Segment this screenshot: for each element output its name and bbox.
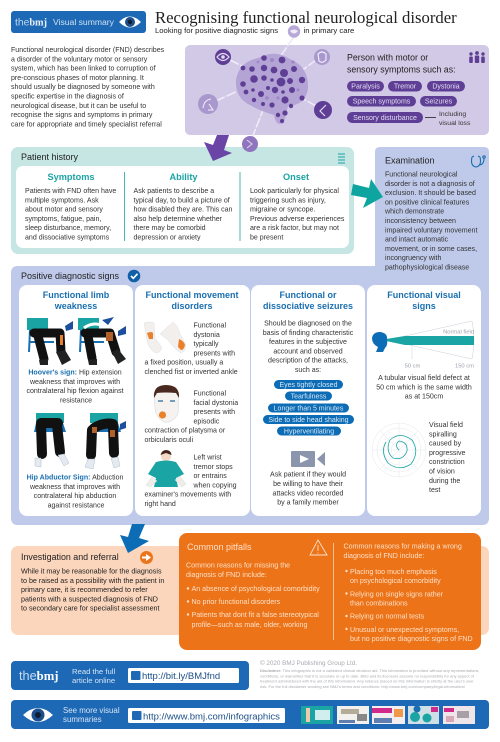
column: ability: Ask patients to describe a xyxy=(134,188,214,195)
column: onset: Previous adverse experiences xyxy=(250,216,345,223)
left column: profile—such as male, older, working xyxy=(192,621,307,629)
card: functional movement disorders: a fixed position, usually a xyxy=(144,360,223,367)
seizure feature pills: Tearfulness xyxy=(291,394,327,400)
card: functional movement disorders: or entrains xyxy=(194,473,227,480)
intro text: recognise the signs and symptoms in primary xyxy=(11,112,153,119)
header badge: Visual summary xyxy=(53,17,115,27)
card: functional movement disorders: tremor stops xyxy=(194,464,233,471)
footer: article link xyxy=(11,661,249,690)
card: visual signs: Functional visual xyxy=(387,290,461,300)
column: symptoms: and dissociative symptoms xyxy=(25,234,110,242)
card: visual signs: of vision xyxy=(429,468,455,476)
icon: mouth xyxy=(288,25,300,38)
brain illustration xyxy=(216,38,316,138)
symptom pills: visual loss xyxy=(439,120,471,127)
diagram: spiral field xyxy=(372,423,426,477)
seizure feature pills: Eyes tightly closed xyxy=(280,382,338,389)
thumbnails xyxy=(301,706,475,724)
card: functional movement disorders: orbicularis oculi xyxy=(144,437,193,444)
icon: stethoscope xyxy=(472,156,485,167)
column: onset: triggering such as injury, xyxy=(250,197,326,204)
card: seizures: description of the attacks, xyxy=(268,358,348,365)
column: ability: there may be comorbid xyxy=(134,225,206,232)
panel: positive diagnostic signs xyxy=(11,147,489,525)
icon: video camera xyxy=(291,451,325,467)
card: visual signs: signs xyxy=(412,301,436,311)
card: functional movement disorders: facial dystonia xyxy=(194,400,238,407)
card: functional movement disorders: clenched fist or inverted ankle xyxy=(144,369,238,376)
card: seizures: dissociative seizures xyxy=(263,301,353,311)
footer: more visual summaries xyxy=(11,700,489,729)
right column: Unusual or unexpected symptoms, xyxy=(350,626,459,634)
card: functional limb weakness: Functional limb xyxy=(43,290,110,300)
heading: Positive diagnostic signs xyxy=(21,271,120,281)
card: functional limb weakness xyxy=(19,285,133,516)
intro text: should usually be diagnosed by someone with xyxy=(11,84,155,91)
right column: Placing too much emphasis xyxy=(350,568,437,576)
seizure feature pills: Longer than 5 minutes xyxy=(274,406,344,412)
card: seizures: be willing to have their xyxy=(273,481,344,488)
panel: investigation and referral: to secondary care for specialist assessment xyxy=(21,605,160,613)
examination text: impaired voluntary movement xyxy=(385,227,477,234)
header badge xyxy=(11,11,146,33)
card: functional movement disorders: episodic xyxy=(194,418,220,425)
right column: on psychological comorbidity xyxy=(350,577,441,585)
column: symptoms: sleep disturbance, memory, xyxy=(25,225,111,232)
illustration: hip abductor sign xyxy=(34,413,126,469)
copyright and disclaimer: treatment administered with the aid of this information. Any reliance placed on this information is strictly at the user's own xyxy=(260,679,473,684)
subtitle: Looking for positive diagnostic signs xyxy=(155,26,278,35)
right column: diagnosis of FND include: xyxy=(344,552,424,560)
examination text: inconsistency between xyxy=(385,218,456,225)
intro text: Functional neurological disorder (FND) describes xyxy=(11,47,165,54)
column: onset: Look particularly for physical xyxy=(250,188,339,195)
footer: article link: thebmj xyxy=(19,669,58,683)
copyright and disclaimer: Disclaimer: This infographic is not a validated clinical decision aid. This information is provided without any representations, xyxy=(260,668,480,673)
footer: article link: http://bit.ly/BMJfnd xyxy=(142,671,220,682)
examination text: exclusion. It should be based xyxy=(385,190,476,197)
copyright and disclaimer: © 2020 BMJ Publishing Group Ltd. xyxy=(260,659,357,667)
symptom pills: Sensory disturbance xyxy=(353,115,417,122)
seizure feature pills xyxy=(263,380,354,436)
intro text: specific expertise in the diagnosis of xyxy=(11,94,124,100)
examination text: on positive clinical features xyxy=(385,199,470,206)
column: symptoms: about motor and sensory xyxy=(25,207,103,214)
card: functional movement disorders: dystonia xyxy=(194,332,220,339)
examination text: which demonstrate xyxy=(384,209,444,216)
card: seizures: Functional or xyxy=(280,290,337,300)
card: functional movement disorders: Functional movement xyxy=(145,290,239,300)
arrow: blue xyxy=(120,524,149,553)
symptom pills: Including xyxy=(439,111,466,118)
examination text: disorder is not a diagnosis of xyxy=(385,181,475,188)
card: seizures: Should be diagnosed on the xyxy=(264,320,352,328)
card: functional movement disorders: Left wrist xyxy=(194,454,222,462)
card: seizures: Ask patient if they would xyxy=(270,472,346,478)
right column: than combinations xyxy=(350,600,408,608)
panel: common pitfalls: Common pitfalls xyxy=(187,542,252,552)
diagram: tubular field: Normal field xyxy=(443,330,474,336)
card: visual signs xyxy=(367,285,481,516)
panel heading: sensory symptoms such as: xyxy=(347,64,456,74)
column: ability: typical day, to build a picture of xyxy=(134,197,230,204)
card: visual signs: constriction xyxy=(429,459,465,466)
icon: warning triangle xyxy=(310,540,327,555)
right column: Relying on single signs rather xyxy=(350,590,444,598)
right column xyxy=(344,542,473,643)
symptom pills: Tremor xyxy=(394,84,417,91)
card: functional limb weakness: Hoover's sign: Hip extension xyxy=(28,370,122,376)
card: functional movement disorders xyxy=(135,285,250,516)
card: visual signs: progressive xyxy=(429,450,466,457)
intro text: system, which has been linked to corruption of xyxy=(11,66,156,73)
panel: investigation and referral: While it may be reasonable for the diagnosis xyxy=(21,568,162,576)
title: Recognising functional neurological disorder xyxy=(155,8,457,27)
seizure feature pills: Hyperventilating xyxy=(284,428,334,436)
icon: orange arrow xyxy=(140,551,153,564)
card: functional limb weakness: contralateral hip flexion against xyxy=(26,388,124,395)
symptom pills: Seizures xyxy=(425,99,453,106)
illustration: tremor xyxy=(146,450,186,487)
column: onset: be present xyxy=(250,234,283,242)
card: visual signs: during the xyxy=(429,478,460,485)
card: visual signs: test xyxy=(429,487,440,494)
diagram: tubular field: 150 cm xyxy=(455,364,474,370)
column: symptoms: Symptoms xyxy=(48,172,94,182)
footer: article link: Read the full xyxy=(72,667,115,676)
column: ability: depression or anxiety xyxy=(134,234,201,242)
card: functional movement disorders: right hand xyxy=(144,501,176,508)
illustration: Hoover's sign xyxy=(27,317,126,365)
intro text: neurological disease, but it can be useful to xyxy=(11,103,146,110)
card: seizures: account and observed xyxy=(273,348,343,355)
card: visual signs: 50 cm which is the same width xyxy=(376,384,472,391)
card: visual signs: A tubular visual field defect at xyxy=(378,375,470,382)
illustration: face xyxy=(154,385,179,422)
card: seizures: by a family member xyxy=(277,500,339,507)
card: functional limb weakness: weakness that improves with xyxy=(29,484,120,491)
card: functional limb weakness: against resistance xyxy=(48,502,104,509)
examination text: pathophysiological disease xyxy=(385,264,469,272)
panel: investigation and referral: to be raised as a possibility with the patient in xyxy=(21,577,164,585)
icon: check xyxy=(128,270,140,282)
examination text xyxy=(384,156,479,272)
card: functional limb weakness: Hip Abductor Sign: Abduction xyxy=(27,474,123,482)
heading: Patient history xyxy=(21,152,79,162)
panel: investigation and referral: primary care, it is recommended to refer xyxy=(21,586,148,594)
copyright and disclaimer: conditions, or warranties that it is accurate or up to date. BMJ and its licensors assume no responsibility for any aspect of xyxy=(260,673,475,678)
arrow: purple xyxy=(204,135,232,161)
card: seizures: attacks video recorded xyxy=(273,490,344,497)
panel: person with symptoms xyxy=(185,25,489,138)
card: functional movement disorders: disorders xyxy=(171,301,213,311)
left column: Common reasons for missing the xyxy=(186,562,290,570)
footer: article link: article online xyxy=(72,676,115,685)
symptom pills: Speech symptoms xyxy=(353,99,411,106)
column: symptoms: symptoms, fatigue, pain, xyxy=(25,216,101,223)
icon: leg xyxy=(198,94,218,114)
panel heading: Person with motor or xyxy=(347,52,428,62)
column: symptoms: Patients with FND often have xyxy=(25,188,116,195)
card: visual signs: caused by xyxy=(429,441,462,448)
card: functional limb weakness: resistance xyxy=(60,397,92,404)
intro text: pre-conscious phases of motor planning. It xyxy=(11,75,144,82)
card: functional limb weakness: weakness xyxy=(54,301,97,311)
card: functional movement disorders: when copying xyxy=(192,482,237,489)
card: functional movement disorders: typically xyxy=(194,341,219,348)
intro text: a disorder of the voluntary motor or sensory xyxy=(11,56,148,63)
column: symptoms xyxy=(25,172,118,242)
card: functional movement disorders: presents with xyxy=(194,409,235,416)
panel: common pitfalls xyxy=(179,533,481,650)
seizure feature pills: Side to side head shaking xyxy=(268,417,349,424)
diagram: tubular field xyxy=(372,321,474,370)
column: ability: Ability xyxy=(169,172,198,182)
column: onset: are a risk factor, but may not xyxy=(250,225,339,232)
left column: No prior functional disorders xyxy=(192,598,281,606)
column: ability xyxy=(134,172,234,242)
symptom pills xyxy=(347,81,471,127)
column: onset: migraine or syncope. xyxy=(250,207,315,214)
icon: hand xyxy=(314,49,330,65)
card: seizures: basis of finding characteristic xyxy=(263,330,354,337)
card: functional movement disorders: Functional xyxy=(194,390,226,398)
examination text: incongruency with xyxy=(385,255,441,262)
examination text: Functional neurological xyxy=(385,172,458,178)
card: functional limb weakness: weakness that improves with xyxy=(29,379,120,386)
card: seizures: features in the subjective xyxy=(269,339,347,346)
panel: patient history xyxy=(11,147,354,254)
card: seizures: such as: xyxy=(295,367,321,374)
card: visual signs: Visual field xyxy=(429,422,463,429)
card: visual signs: as at 150cm xyxy=(405,394,443,401)
right column: but no positive diagnostic signs of FND xyxy=(350,635,473,643)
card: functional limb weakness: contralateral hip abduction xyxy=(34,493,116,500)
card: visual signs: spiralling xyxy=(429,431,457,438)
panel: investigation and referral: Investigation and referral xyxy=(21,552,119,562)
card: seizures xyxy=(251,285,365,516)
column: ability: also help determine whether xyxy=(134,216,223,223)
left column: An absence of psychological comorbidity xyxy=(192,585,320,593)
subtitle: in primary care xyxy=(304,26,354,35)
icon: eye xyxy=(215,49,231,65)
examination text: and intact automatic xyxy=(385,237,449,244)
right column: Common reasons for making a wrong xyxy=(344,542,462,550)
examination text: Examination xyxy=(385,156,435,166)
footer: more visual summaries: http://www.bmj.com/infographics xyxy=(143,712,280,722)
illustration: foot and hand xyxy=(144,322,186,353)
header badge: thebmj xyxy=(15,18,47,28)
left column: diagnosis of FND include: xyxy=(186,571,267,579)
card: functional movement disorders: Functional xyxy=(194,322,226,330)
column: onset xyxy=(250,172,346,242)
icon: eye xyxy=(23,708,53,722)
column: symptoms: multiple symptoms. Ask xyxy=(25,197,99,204)
panel: investigation and referral xyxy=(11,546,489,635)
panel: investigation and referral: patients with a suspected diagnosis of FND xyxy=(21,595,158,603)
examination text: movement, or in some cases, xyxy=(385,246,477,253)
symptom pills: Paralysis xyxy=(351,84,380,91)
column: ability: how disabled they are. This can xyxy=(134,207,233,214)
card: functional movement disorders: presents with xyxy=(194,350,235,357)
intro text: care for appropriate and timely specialist referral xyxy=(11,121,162,128)
diagram: tubular field: 50 cm xyxy=(405,364,421,370)
symptom pills: Dystonia xyxy=(432,84,460,91)
footer: more visual summaries: See more visual xyxy=(63,706,120,715)
right column: Relying on normal tests xyxy=(350,612,425,620)
icon: arm xyxy=(314,101,332,119)
footer: more visual summaries: summaries xyxy=(63,715,102,724)
card: functional movement disorders: contraction of platysma or xyxy=(144,428,226,435)
icon: list xyxy=(338,154,345,163)
arrow: teal xyxy=(351,179,383,208)
copyright and disclaimer: risk. For the full disclaimer wording see BMJ's terms and conditions: http://www.bmj.com/company/legal-information/ xyxy=(260,684,466,689)
left column xyxy=(186,562,322,629)
copyright and disclaimer xyxy=(260,659,481,689)
icon: people xyxy=(469,51,485,63)
column: onset: Onset xyxy=(283,172,309,182)
left column: Patients that dont fit a false stereotypical xyxy=(192,611,319,619)
icon: bottom link circle xyxy=(242,136,258,152)
card: functional movement disorders: examiner's movements with xyxy=(144,492,231,499)
